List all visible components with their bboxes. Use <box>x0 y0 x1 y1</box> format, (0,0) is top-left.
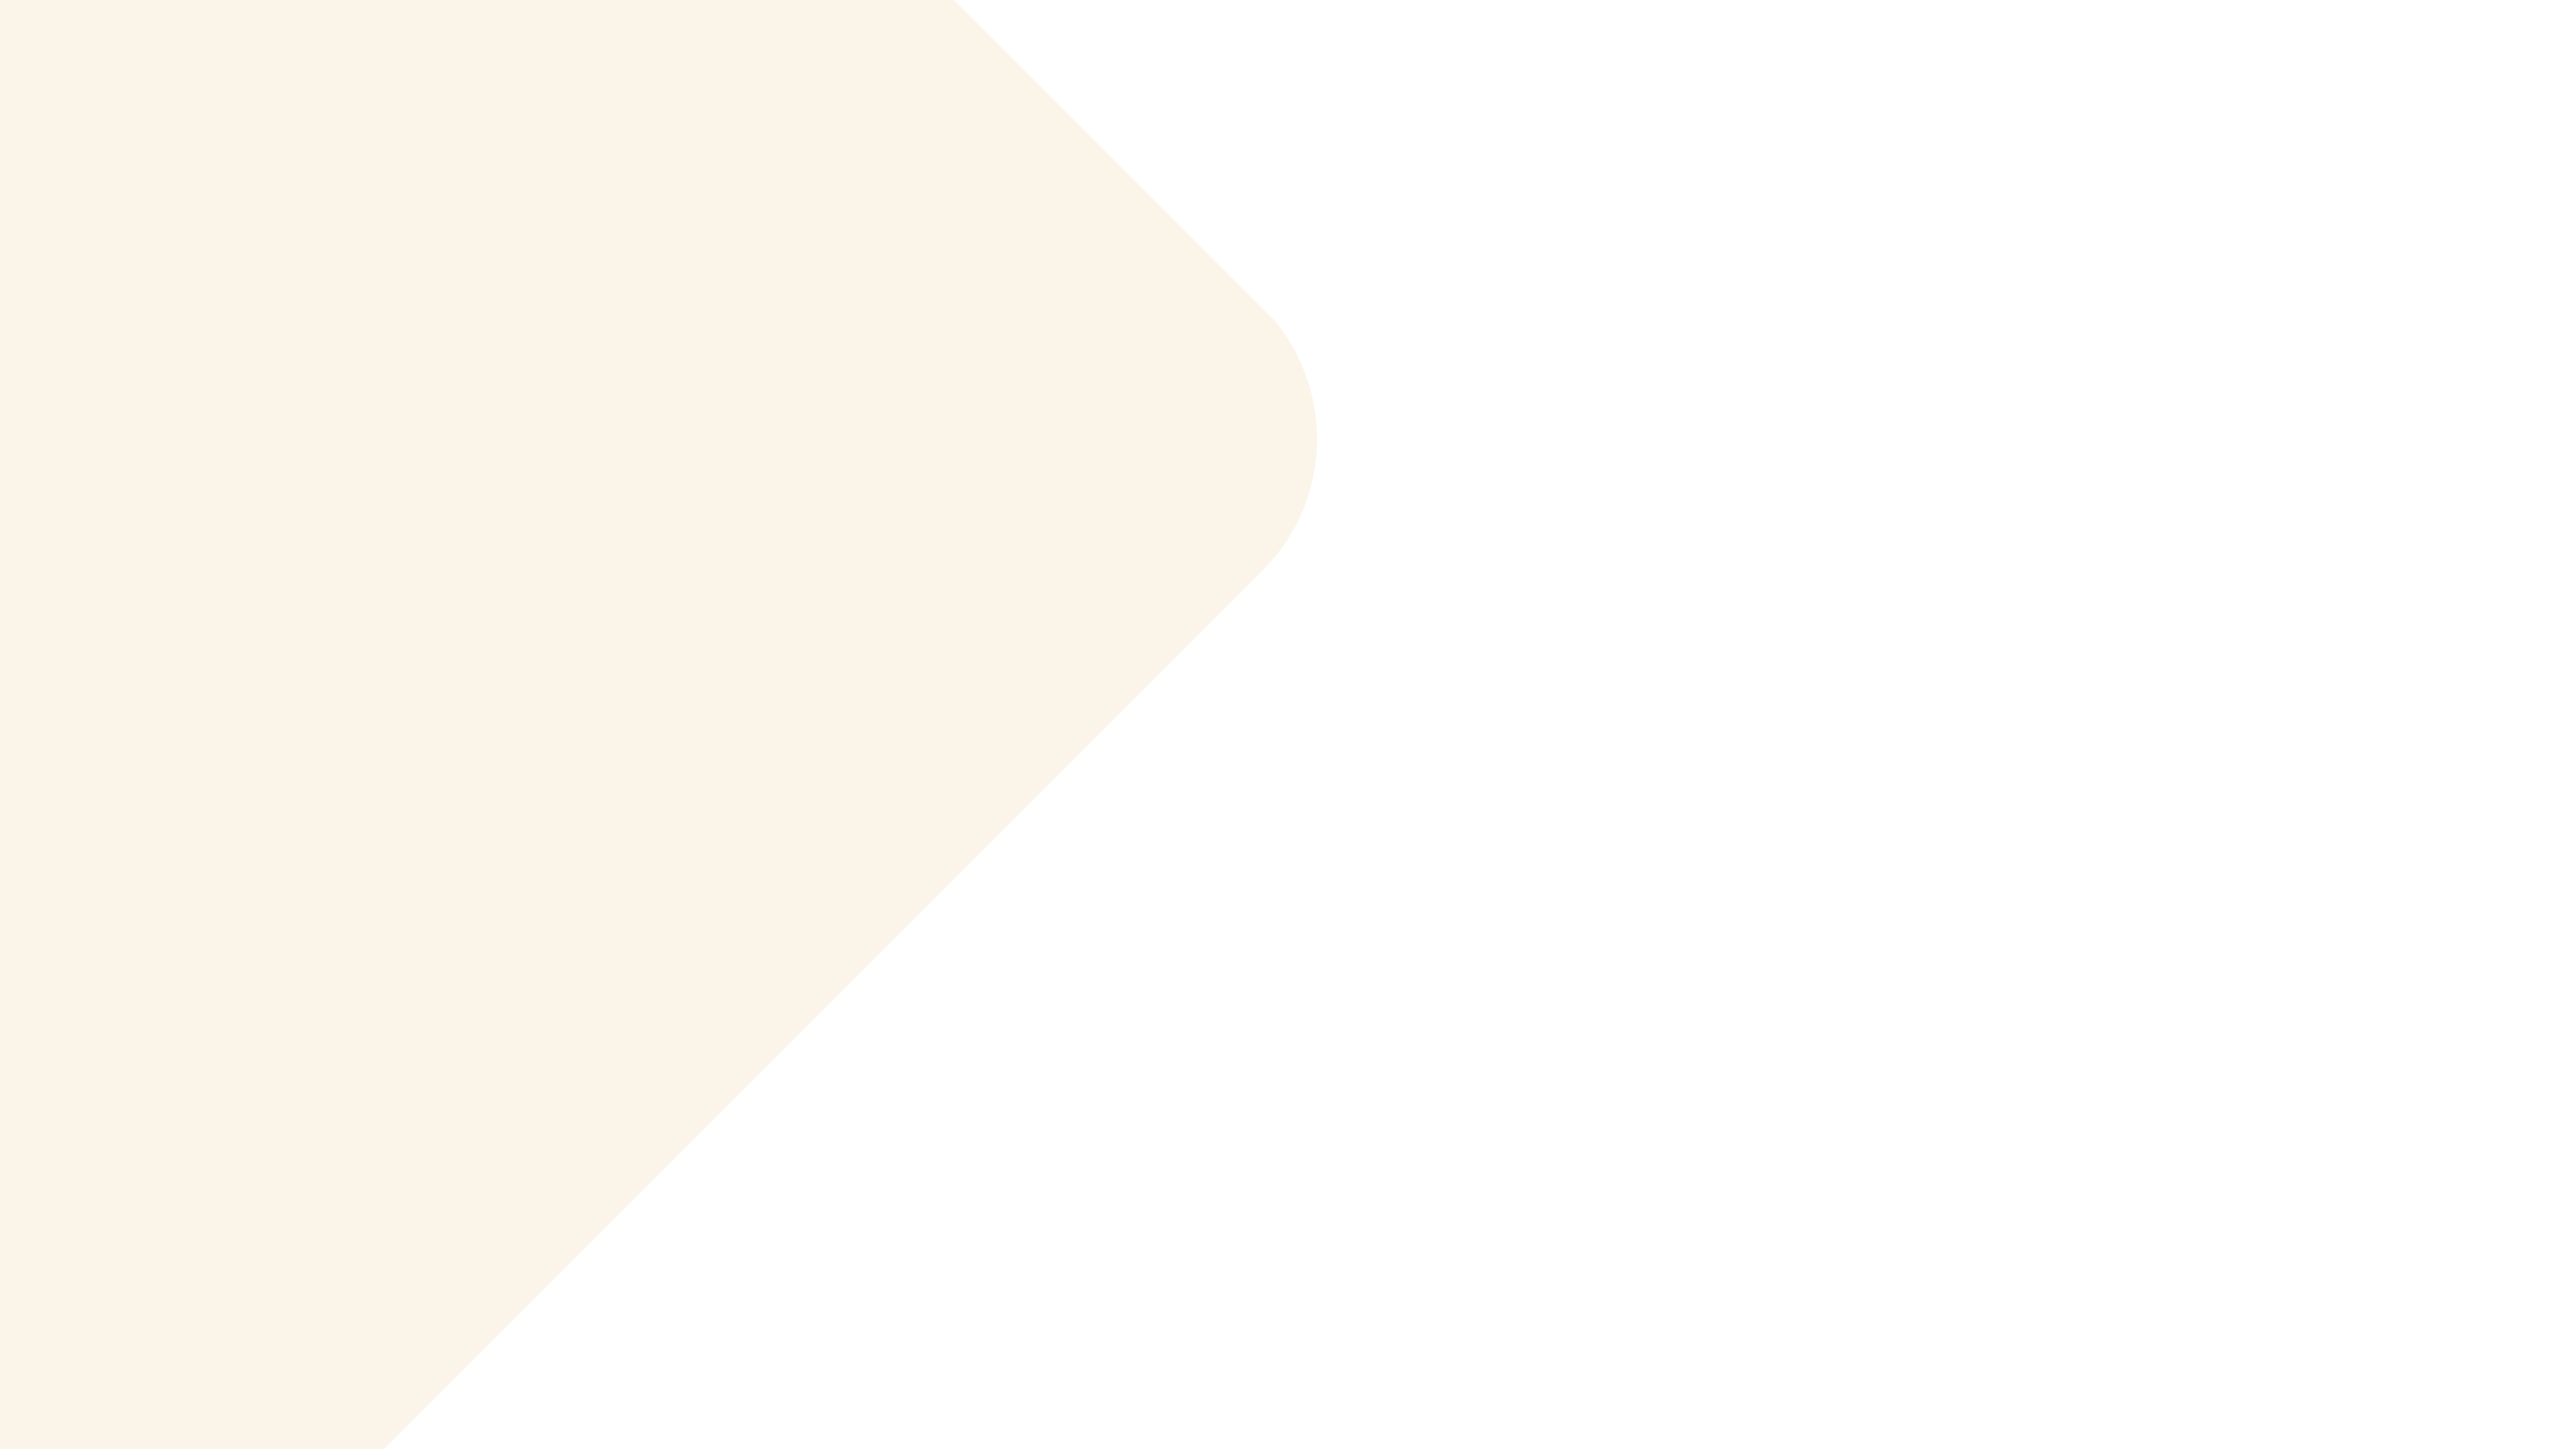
panel: cream rounded arrow shape <box>0 0 1317 1449</box>
